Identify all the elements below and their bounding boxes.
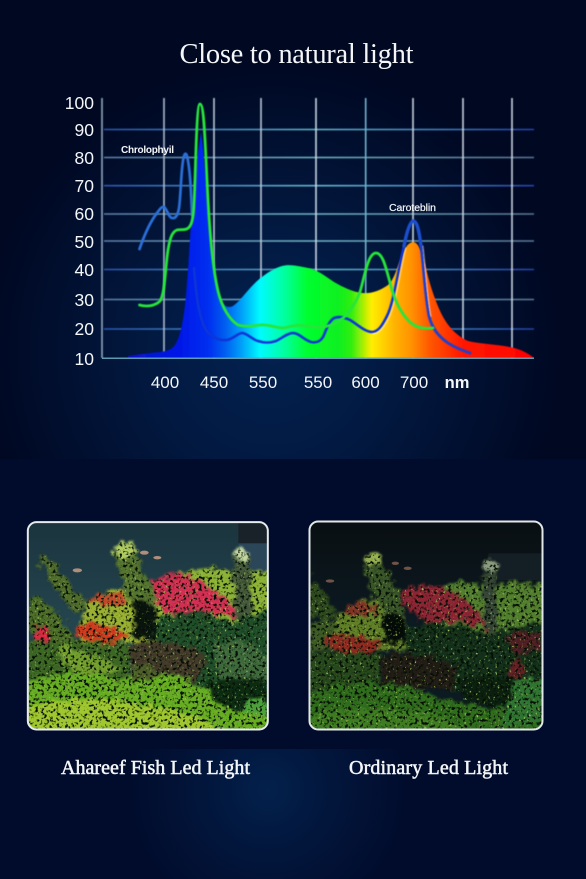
y axis labels: 40 xyxy=(75,260,94,280)
x axis labels: 700 xyxy=(400,373,428,392)
spectrum chart xyxy=(65,93,534,392)
x axis labels: 450 xyxy=(200,373,228,392)
y axis labels: 70 xyxy=(75,176,94,196)
plants xyxy=(307,553,545,733)
x axis labels: nm xyxy=(445,374,469,392)
fish xyxy=(73,551,161,572)
x axis labels xyxy=(151,373,469,392)
x axis labels: 400 xyxy=(151,373,179,392)
baseline xyxy=(102,357,534,359)
y axis labels: 10 xyxy=(75,349,94,369)
title: Close to natural light xyxy=(180,39,414,70)
y axis labels: 30 xyxy=(75,290,94,310)
photo frame xyxy=(28,522,268,729)
y axis labels: 60 xyxy=(75,204,94,224)
photo: ordinary LED aquarium xyxy=(307,521,545,733)
x axis labels: 550 xyxy=(249,373,277,392)
plants xyxy=(25,542,270,733)
label: Chrolophyil: Chrolophyil xyxy=(121,145,174,156)
caption: Ahareef Fish Led Light: Ahareef Fish Led Light xyxy=(61,757,250,779)
fish xyxy=(326,562,412,583)
y axis labels: 80 xyxy=(75,148,94,168)
x axis labels: 600 xyxy=(351,373,380,392)
photo frame xyxy=(309,521,542,729)
dark blue curve: carotenoid xyxy=(194,221,470,353)
blue curve: chlorophyll xyxy=(140,154,192,249)
x axis labels: 550 xyxy=(304,373,332,392)
green curve xyxy=(140,104,433,328)
chart grid xyxy=(102,98,534,358)
y axis labels xyxy=(65,93,94,369)
y axis labels: 100 xyxy=(65,93,94,113)
caption: Ordinary Led Light: Ordinary Led Light xyxy=(349,757,508,779)
y axis labels: 20 xyxy=(75,319,94,339)
y axis labels: 50 xyxy=(75,232,94,252)
y axis labels: 90 xyxy=(75,120,94,140)
label: Caroteblin: Caroteblin xyxy=(389,202,436,214)
spectrum area xyxy=(128,132,534,358)
photo: Ahareef fish LED aquarium xyxy=(25,522,270,733)
